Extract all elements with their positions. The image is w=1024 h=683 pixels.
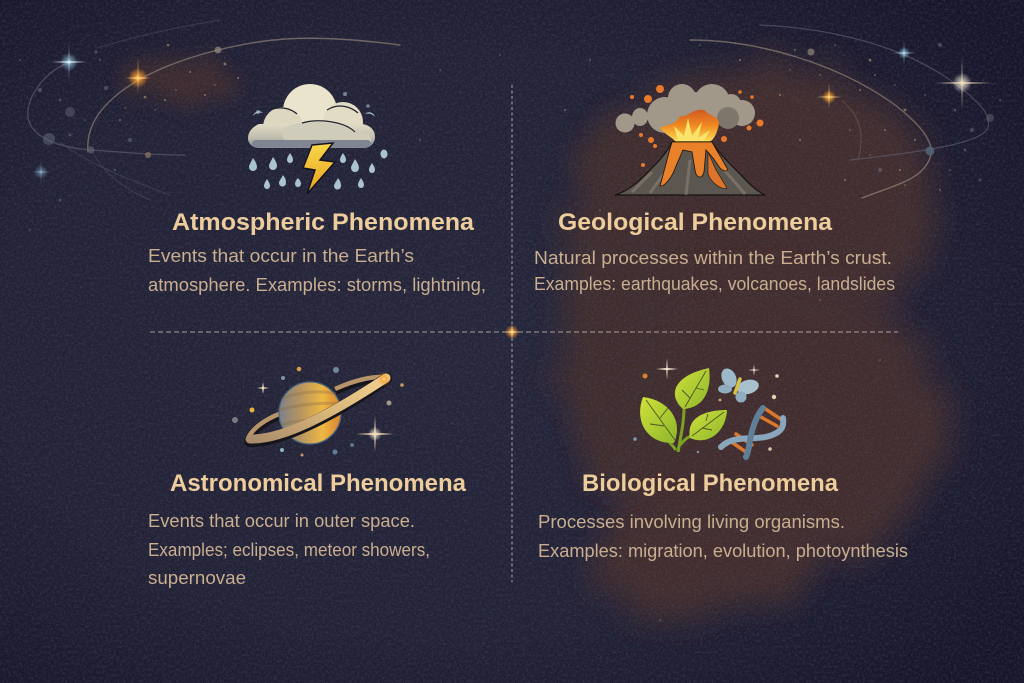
text: biological description: Examples: migration, evolution, photoynthesis bbox=[538, 541, 908, 561]
title: atmospheric: Atmospheric Phenomena bbox=[172, 209, 475, 236]
raindrops bbox=[249, 92, 388, 190]
lightning bolt bbox=[303, 143, 335, 194]
icon: leaves, butterfly and DNA bbox=[633, 358, 783, 457]
eruption fire bbox=[660, 110, 719, 142]
stars around biology icon bbox=[633, 358, 779, 453]
star: blue lower left bbox=[32, 159, 50, 185]
dust specks bbox=[99, 44, 941, 621]
orbit lines, left bbox=[28, 20, 400, 200]
ash plume bbox=[616, 84, 755, 133]
text: geological description bbox=[534, 248, 895, 294]
text: astronomical description: Examples; eclipses, meteor showers, bbox=[148, 540, 430, 560]
title: astronomical: Astronomical Phenomena bbox=[170, 470, 467, 497]
title: geological: Geological Phenomena bbox=[558, 209, 833, 236]
star: white upper left bbox=[51, 43, 87, 81]
butterfly bbox=[718, 366, 760, 402]
center star bbox=[504, 324, 520, 340]
ridges bbox=[632, 160, 745, 195]
sparkle stars bbox=[232, 367, 404, 456]
planet bbox=[279, 382, 341, 444]
planet bands bbox=[279, 392, 341, 425]
star: orange upper left bbox=[125, 56, 151, 94]
text: biological description bbox=[538, 512, 908, 561]
text: biological description: Processes involving living organisms. bbox=[538, 512, 845, 532]
text: atmospheric description: Events that occur in the Earth’s bbox=[148, 246, 414, 266]
volcano cone bbox=[615, 142, 765, 195]
cloud body bbox=[248, 84, 375, 148]
text: astronomical description bbox=[148, 511, 430, 588]
stem bbox=[665, 408, 692, 452]
icon: storm cloud bbox=[248, 84, 388, 194]
star: white right bbox=[936, 57, 992, 111]
star: orange right bbox=[816, 82, 842, 109]
text: atmospheric description: atmosphere. Examples: storms, lightning, bbox=[148, 275, 486, 295]
leaf veins bbox=[646, 371, 724, 440]
leaf left bbox=[640, 397, 677, 443]
text: astronomical description: Events that occur in outer space. bbox=[148, 511, 415, 531]
text: astronomical description: supernovae bbox=[148, 568, 246, 588]
text: atmospheric description bbox=[148, 246, 486, 295]
dashed vertical divider bbox=[511, 85, 513, 582]
icon: volcano bbox=[615, 84, 765, 195]
ring flare bbox=[377, 372, 391, 386]
text: geological description: Examples: earthquakes, volcanoes, landslides bbox=[534, 274, 895, 294]
crater flames bbox=[674, 118, 710, 141]
ring back bbox=[248, 378, 387, 440]
title: biological: Biological Phenomena bbox=[582, 470, 839, 497]
ring front bbox=[250, 379, 386, 441]
text: geological description: Natural processes within the Earth’s crust. bbox=[534, 248, 892, 268]
leaf top bbox=[675, 368, 710, 409]
dashed horizontal divider bbox=[150, 331, 898, 333]
icon: saturn bbox=[232, 367, 404, 456]
lava sparks bbox=[630, 85, 764, 167]
leaf right bbox=[689, 410, 727, 440]
star: blue upper right bbox=[892, 40, 916, 66]
orbit lines, right bbox=[690, 25, 994, 198]
DNA helix bbox=[721, 408, 783, 457]
lava streams bbox=[660, 142, 727, 186]
